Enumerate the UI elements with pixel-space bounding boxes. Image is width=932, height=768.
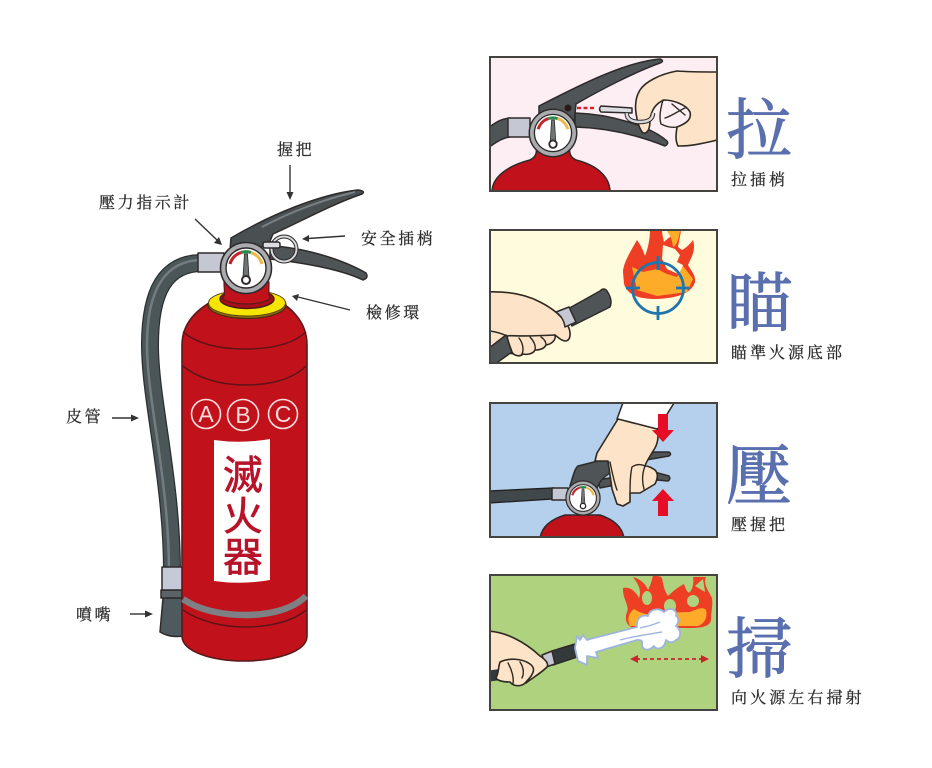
label text: 滅火器: 滅 (223, 454, 263, 498)
rivet (564, 104, 572, 112)
finger lines (610, 462, 645, 493)
panel: squeeze (488, 400, 717, 538)
upper handle (539, 59, 662, 124)
spray (575, 609, 680, 665)
arrow down (652, 414, 674, 442)
step caption: 壓握把: 壓握把 (731, 515, 788, 534)
label: 握把: 握把 (277, 140, 314, 159)
label: 壓力指示計: 壓力指示計 (99, 194, 192, 212)
arrow: 握把 (286, 165, 294, 200)
scene: aim (491, 231, 696, 362)
gauge (529, 109, 577, 157)
arrow: 皮管 (112, 414, 139, 422)
panel: aim (484, 229, 717, 372)
cylinder body (182, 296, 307, 661)
hose (488, 488, 553, 503)
step word: 拉: 拉 (726, 95, 792, 168)
label: 檢修環: 檢修環 (366, 304, 422, 322)
ferrule (542, 651, 555, 667)
sleeve (616, 404, 674, 430)
flames (623, 575, 712, 628)
arrow: 檢修環 (292, 294, 350, 310)
step word: 壓: 壓 (726, 441, 792, 514)
label text: 滅火器 (223, 454, 263, 580)
coupling (552, 488, 568, 500)
finger lines (490, 331, 546, 354)
step word: 瞄: 瞄 (727, 268, 793, 341)
label text: 滅火器: 火 (223, 495, 263, 539)
hose (486, 668, 508, 682)
flame core (628, 608, 707, 626)
finger lines (660, 100, 685, 127)
class letters: A (198, 401, 214, 427)
step caption: 向火源左右掃射: 向火源左右掃射 (731, 688, 865, 707)
ring (627, 113, 653, 122)
red sweep arrow (630, 655, 709, 663)
hand (595, 419, 658, 506)
red dashes (577, 107, 596, 109)
pin (600, 106, 632, 113)
arrow: 安全插梢 (302, 235, 345, 242)
upper lever (648, 451, 672, 460)
label: 皮管: 皮管 (66, 408, 103, 426)
label: 安全插梢: 安全插梢 (361, 230, 435, 248)
class letters: C (275, 401, 291, 427)
hand palm (485, 631, 548, 683)
nozzle (566, 289, 611, 326)
upper handle (230, 190, 363, 250)
hand palm (485, 292, 570, 355)
lower lever (575, 113, 668, 146)
flame hole (662, 245, 683, 275)
body seams (183, 332, 306, 627)
hose (147, 260, 204, 572)
panel: pull the pin (488, 57, 722, 192)
lower lever (270, 246, 367, 280)
fingers (496, 659, 533, 686)
hose (491, 117, 510, 147)
spray lines (620, 622, 662, 640)
coupling (198, 253, 224, 272)
finger lines (508, 662, 523, 684)
white label (214, 439, 270, 583)
flame cut-outs (642, 577, 705, 613)
gauge (566, 481, 600, 515)
nozzle (160, 567, 183, 636)
main illustration: fire extinguisher (147, 190, 367, 661)
hose (491, 334, 512, 362)
label text: 滅火器: 器 (223, 536, 263, 580)
flame tip (666, 230, 680, 247)
safety pin (263, 236, 296, 262)
lower lever (598, 473, 670, 488)
scene: sweep (485, 575, 712, 686)
coupling (508, 118, 530, 137)
nozzle (552, 643, 580, 665)
fingers (507, 335, 555, 356)
arrow up (652, 489, 674, 516)
cylinder top (492, 148, 610, 192)
flame core (632, 266, 693, 296)
step caption: 拉插梢: 拉插梢 (731, 171, 788, 189)
step caption: 瞄準火源底部: 瞄準火源底部 (731, 344, 845, 362)
class marks A B C (192, 400, 298, 430)
grey band (183, 596, 306, 615)
scene: pull (488, 59, 722, 192)
flame (623, 229, 695, 299)
target reticle (626, 256, 689, 320)
cylinder top (540, 515, 624, 538)
arrow: 噴嘴 (130, 610, 153, 618)
panel: sweep (485, 575, 717, 710)
yellow inspection ring (208, 282, 286, 318)
ferrule (556, 307, 576, 327)
hand (635, 71, 722, 146)
class letters: B (235, 402, 251, 428)
arrow: 壓力指示計 (195, 219, 222, 245)
handle (569, 461, 610, 488)
scene: squeeze (488, 400, 676, 538)
label: 噴嘴: 噴嘴 (76, 606, 113, 624)
class letters (198, 401, 291, 428)
step word: 掃: 掃 (726, 614, 792, 687)
pressure gauge (220, 242, 272, 294)
